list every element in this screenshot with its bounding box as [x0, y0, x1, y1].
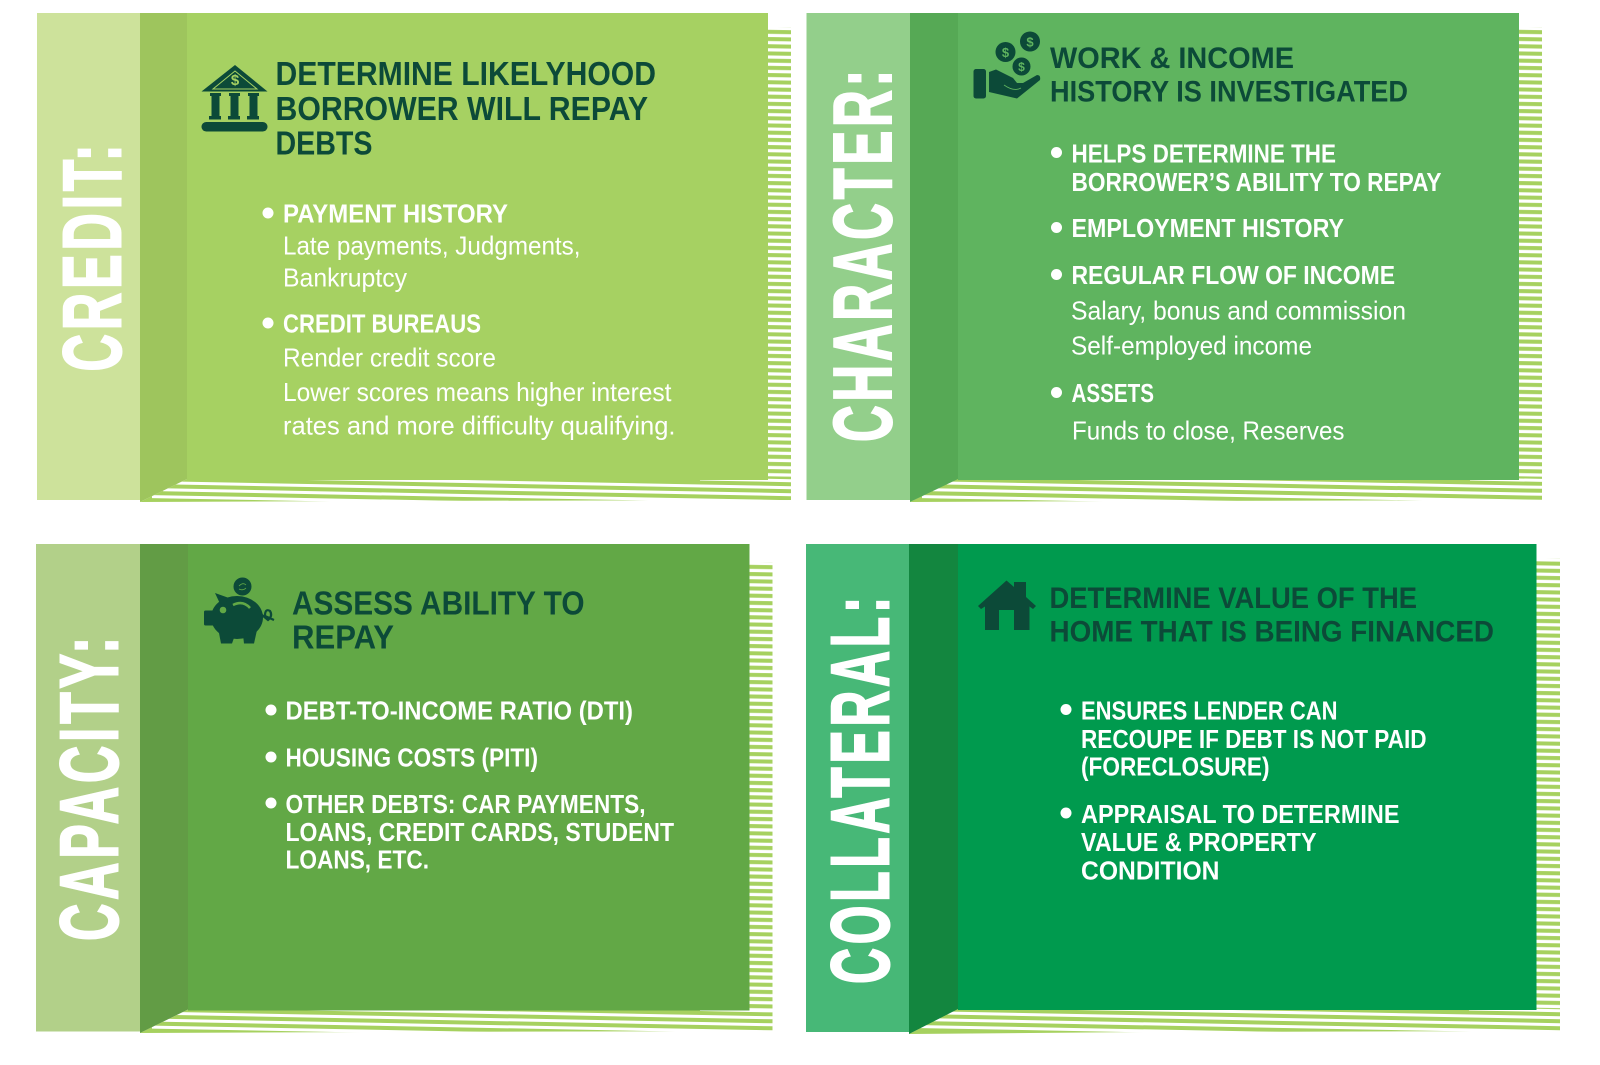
- bullet list: credit: [262, 198, 676, 440]
- bullet list: credit: CREDIT BUREAUS: [283, 308, 481, 338]
- heading: credit: BORROWER WILL REPAY: [276, 90, 648, 127]
- bullet list: credit: Bankruptcy: [283, 262, 407, 292]
- side title: capacity: CAPACITY:: [42, 633, 136, 941]
- bullet list: credit: PAYMENT HISTORY: [283, 198, 508, 228]
- icon: hand with coins: $: [1018, 60, 1025, 74]
- heading: collateral: HOME THAT IS BEING FINANCED: [1050, 616, 1494, 648]
- side title: collateral: COLLATERAL:: [814, 593, 906, 984]
- heading: credit: [276, 55, 656, 162]
- bullet list: character: REGULAR FLOW OF INCOME: [1072, 260, 1395, 290]
- panel: credit: [37, 13, 791, 509]
- bullet list: capacity: LOANS, ETC.: [286, 844, 429, 874]
- panel: collateral: [806, 544, 1560, 1039]
- bullet list: capacity: LOANS, CREDIT CARDS, STUDENT: [286, 817, 674, 847]
- bullet list: capacity: DEBT-TO-INCOME RATIO (DTI): [286, 696, 633, 726]
- bullet list: credit: rates and more difficulty qualifying.: [283, 410, 676, 440]
- heading: capacity: ASSESS ABILITY TO: [292, 584, 584, 622]
- heading: character: [1050, 42, 1408, 108]
- heading: capacity: [292, 584, 584, 656]
- bullet list: collateral: VALUE & PROPERTY: [1081, 827, 1316, 857]
- heading: collateral: [1050, 582, 1494, 648]
- heading: character: WORK & INCOME: [1050, 42, 1294, 75]
- bullet list: character: Funds to close, Reserves: [1072, 416, 1344, 446]
- bullet list: capacity: OTHER DEBTS: CAR PAYMENTS,: [286, 789, 646, 819]
- icon: hand with coins: [974, 32, 1040, 98]
- icon: hand with coins: $: [1026, 34, 1034, 50]
- side title: credit: CREDIT:: [46, 141, 138, 372]
- heading: collateral: DETERMINE VALUE OF THE: [1050, 582, 1417, 615]
- bullet list: collateral: CONDITION: [1081, 856, 1220, 886]
- icon: piggy bank: [204, 578, 274, 644]
- bullet list: character: ASSETS: [1072, 378, 1154, 408]
- bullet list: credit: Lower scores means higher interest: [283, 377, 672, 407]
- panel: capacity: [36, 544, 772, 1039]
- bullet list: character: Salary, bonus and commission: [1071, 296, 1406, 326]
- bullet list: collateral: APPRAISAL TO DETERMINE: [1081, 799, 1400, 829]
- bullet list: collateral: RECOUPE IF DEBT IS NOT PAID: [1081, 724, 1426, 754]
- icon: bank: [202, 65, 268, 132]
- bullet list: character: Self-employed income: [1071, 330, 1312, 360]
- bullet list: character: BORROWER’S ABILITY TO REPAY: [1072, 167, 1442, 197]
- bullet list: character: EMPLOYMENT HISTORY: [1072, 213, 1344, 243]
- icon: bank: $: [231, 72, 240, 89]
- bullet list: collateral: ENSURES LENDER CAN: [1081, 696, 1338, 726]
- bullet list: credit: Late payments, Judgments,: [283, 230, 580, 260]
- heading: credit: DEBTS: [276, 124, 372, 162]
- icon: hand with coins: $: [1002, 45, 1010, 60]
- heading: character: HISTORY IS INVESTIGATED: [1050, 76, 1408, 108]
- bullet list: character: [1051, 138, 1442, 446]
- heading: credit: DETERMINE LIKELYHOOD: [276, 55, 656, 92]
- bullet list: collateral: [1060, 696, 1426, 886]
- bullet list: character: HELPS DETERMINE THE: [1072, 138, 1336, 168]
- bullet list: credit: Render credit score: [283, 342, 496, 372]
- bullet list: collateral: (FORECLOSURE): [1081, 752, 1270, 782]
- bullet list: capacity: [266, 696, 674, 874]
- heading: capacity: REPAY: [292, 618, 394, 656]
- icon: house: [978, 580, 1036, 630]
- panel: character: [806, 13, 1542, 508]
- bullet list: capacity: HOUSING COSTS (PITI): [286, 742, 538, 772]
